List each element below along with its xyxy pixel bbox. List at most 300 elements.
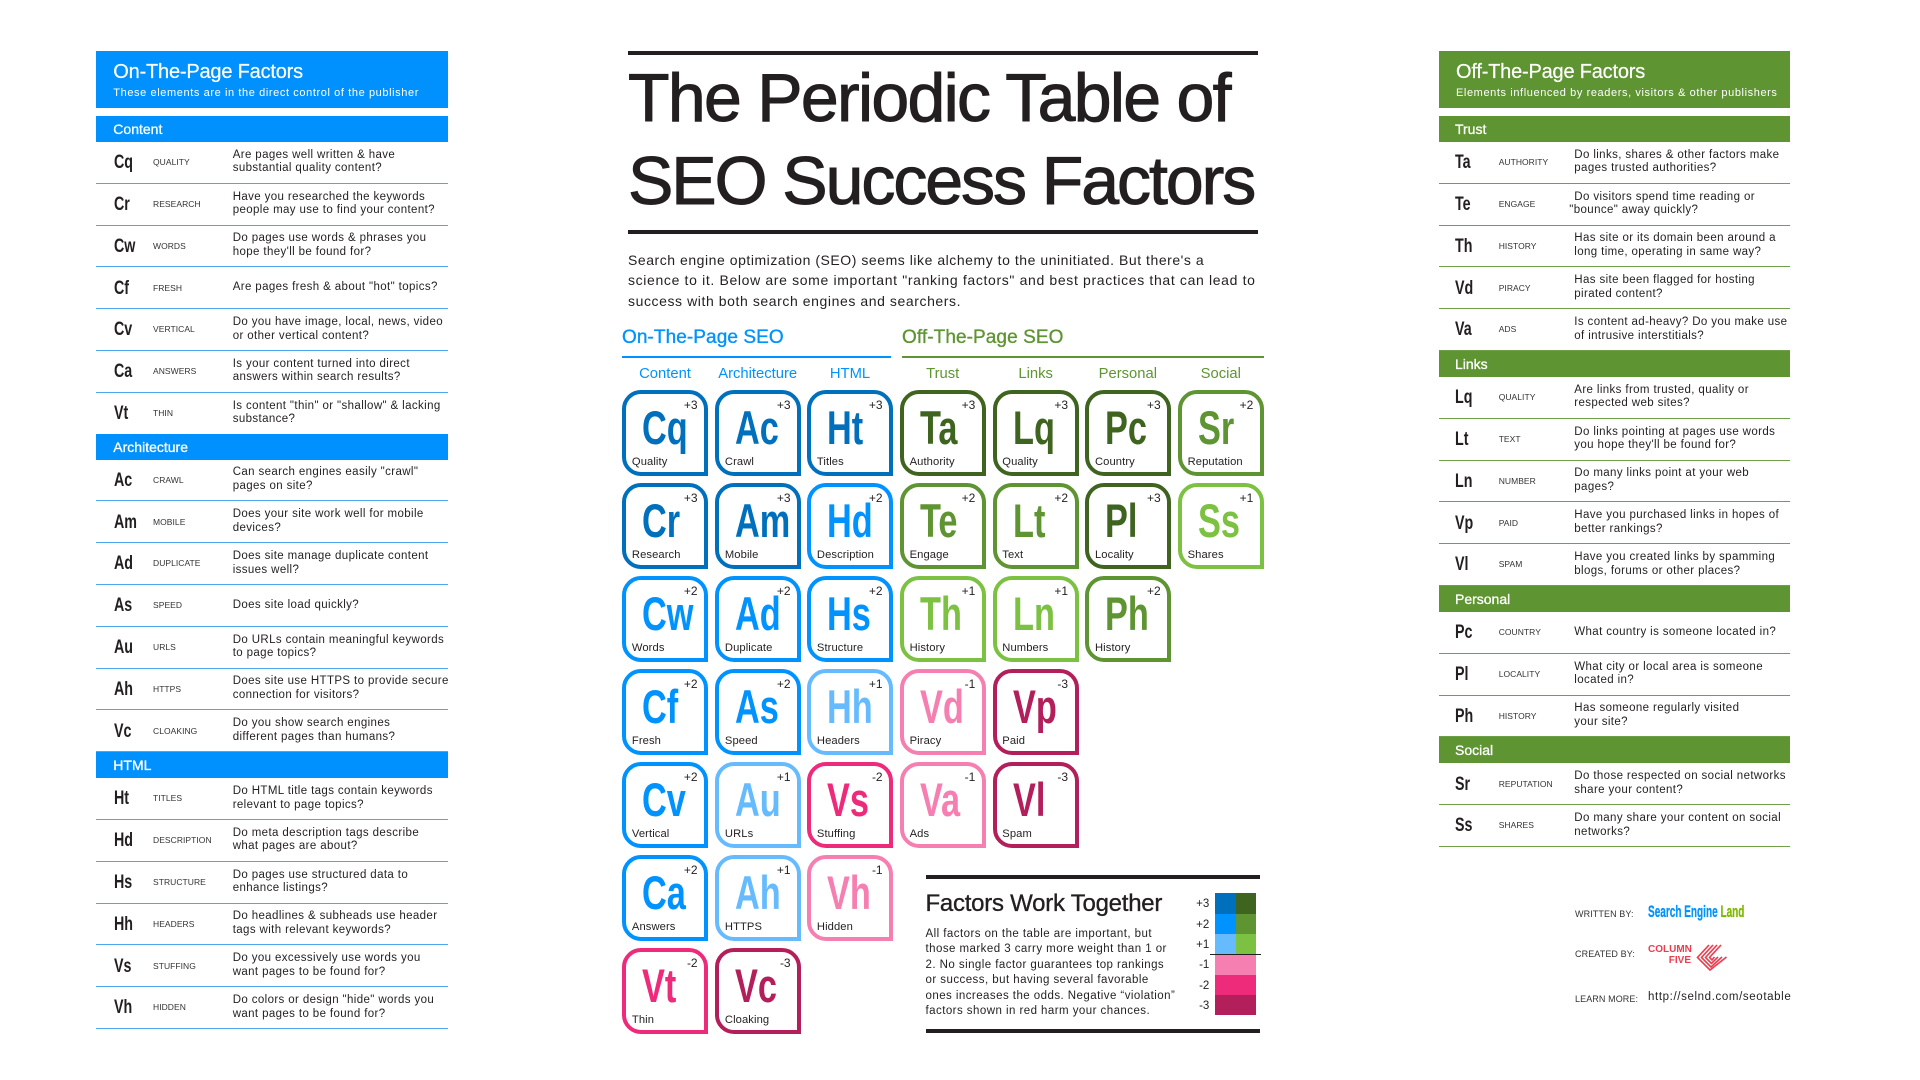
row: Ss: Do many share your content on social bbox=[1574, 812, 1781, 824]
row: Ca: Is your content turned into direct bbox=[233, 358, 410, 370]
legend body text: those marked 3 carry more weight than 1 or bbox=[926, 943, 1167, 955]
row: Au: Au bbox=[114, 637, 133, 658]
section bar: content: Content bbox=[113, 121, 162, 137]
element: Hd: +2 bbox=[869, 491, 883, 505]
credits: LEARN MORE: bbox=[1575, 994, 1638, 1004]
row: Te bbox=[1439, 184, 1790, 226]
element: Vp: -3 bbox=[1057, 677, 1068, 691]
row: Vc bbox=[96, 710, 448, 752]
row: Hd: Do meta description tags describe bbox=[233, 827, 419, 839]
legend: colour scale: -2 bbox=[1199, 980, 1209, 992]
element: Pc: Country bbox=[1095, 456, 1135, 468]
element: As bbox=[715, 669, 801, 755]
element: Ac: Crawl bbox=[725, 456, 754, 468]
element: Cw: +2 bbox=[684, 584, 698, 598]
row: Th: Th bbox=[1455, 236, 1472, 257]
row: Vd: Has site been flagged for hosting bbox=[1574, 274, 1755, 286]
row: Th bbox=[1439, 226, 1790, 267]
row: Hs: Hs bbox=[114, 872, 132, 893]
row: Ln: Ln bbox=[1455, 471, 1472, 492]
periodic table grid bbox=[622, 390, 1264, 1034]
legend: colour scale: +3 bbox=[1196, 898, 1209, 910]
element: Te: Te bbox=[920, 494, 958, 547]
row: Lt: you hope they'll be found for? bbox=[1574, 439, 1736, 451]
row: Vh: Vh bbox=[114, 997, 132, 1018]
legend: colour scale: +2 bbox=[1196, 918, 1209, 930]
row: Ca: answers within search results? bbox=[233, 371, 401, 383]
row: Vc: CLOAKING bbox=[153, 726, 197, 736]
row: Vp bbox=[1439, 502, 1790, 544]
element: Au: URLs bbox=[725, 828, 753, 840]
row: Th: Has site or its domain been around a bbox=[1574, 232, 1776, 244]
element: Hs bbox=[807, 576, 893, 662]
element: Hs: Hs bbox=[827, 587, 871, 640]
element: Sr: Reputation bbox=[1188, 456, 1243, 468]
element: Cf bbox=[622, 669, 708, 755]
element: Au: +1 bbox=[777, 770, 791, 784]
row: Va: ADS bbox=[1499, 324, 1516, 334]
row: Au bbox=[96, 627, 448, 669]
row: Ht: relevant to page topics? bbox=[233, 799, 364, 811]
section bar: trust: Trust bbox=[1455, 121, 1486, 137]
row: Hd: Hd bbox=[114, 830, 133, 851]
element: Ln: Numbers bbox=[1002, 642, 1048, 654]
row: Vt bbox=[96, 393, 448, 435]
row: Cr: people may use to find your content? bbox=[233, 204, 435, 216]
row: Lq: respected web sites? bbox=[1574, 397, 1690, 409]
element: Ah bbox=[715, 855, 801, 941]
row: Ta: AUTHORITY bbox=[1499, 157, 1548, 167]
row: Vl: Have you created links by spamming bbox=[1574, 551, 1775, 563]
section bar: html: HTML bbox=[113, 757, 151, 773]
logo: column five wordmark: COLUMN bbox=[1648, 944, 1692, 955]
row: Ad: Does site manage duplicate content bbox=[233, 550, 428, 562]
heading: off-the-page seo bbox=[902, 325, 1264, 358]
legend body text: 2. No single factor guarantees top rankings bbox=[926, 958, 1164, 970]
row: Ss: Ss bbox=[1455, 815, 1472, 836]
row: Hh: tags with relevant keywords? bbox=[233, 924, 391, 936]
logo: column five chevrons bbox=[1696, 944, 1727, 972]
element: Hs: +2 bbox=[869, 584, 883, 598]
element: Ph: History bbox=[1095, 642, 1130, 654]
row: Ah: connection for visitors? bbox=[233, 689, 359, 701]
element: Vt: Vt bbox=[642, 959, 677, 1012]
intro text: Search engine optimization (SEO) seems like alchemy to the uninitiated. But there's a bbox=[628, 252, 1204, 268]
element: Va bbox=[900, 762, 986, 848]
row: Th: long time, operating in same way? bbox=[1574, 246, 1761, 258]
row: Hs: Do pages use structured data to bbox=[233, 869, 408, 881]
panel header: Elements influenced by readers, visitors & other publishers bbox=[1456, 87, 1778, 99]
element: Pl: Locality bbox=[1095, 549, 1134, 561]
row: Ht bbox=[96, 778, 448, 820]
row: Cv: Cv bbox=[114, 319, 132, 340]
row: Vh: HIDDEN bbox=[153, 1002, 186, 1012]
element: Sr: +2 bbox=[1240, 398, 1253, 412]
row: Sr: Do those respected on social networks bbox=[1574, 770, 1786, 782]
panel: factors work together bbox=[926, 875, 1260, 1033]
element: Ad: Duplicate bbox=[725, 642, 772, 654]
heading: on-the-page seo bbox=[622, 325, 891, 358]
section bar: architecture: Architecture bbox=[113, 439, 188, 455]
row: Vp: Have you purchased links in hopes of bbox=[1574, 509, 1779, 521]
row: Cr: RESEARCH bbox=[153, 199, 201, 209]
panel: on-the-page factors bbox=[96, 51, 449, 1029]
row: Hd: DESCRIPTION bbox=[153, 835, 212, 845]
row: Pl: LOCALITY bbox=[1499, 669, 1540, 679]
row: Vl: SPAM bbox=[1499, 559, 1522, 569]
column headings: Links bbox=[1018, 366, 1053, 382]
row: Ad: DUPLICATE bbox=[153, 558, 201, 568]
element: Au bbox=[715, 762, 801, 848]
element: Cq: +3 bbox=[684, 398, 698, 412]
row: Te: Do visitors spend time reading or bbox=[1574, 191, 1755, 203]
element: Ah: Ah bbox=[735, 866, 781, 919]
element: Cf: +2 bbox=[684, 677, 698, 691]
element: Vp: Paid bbox=[1002, 735, 1025, 747]
row: Vs: STUFFING bbox=[153, 961, 196, 971]
element: Vc: Vc bbox=[735, 959, 777, 1012]
row: Am: Does your site work well for mobile bbox=[233, 508, 424, 520]
element: Ln bbox=[993, 576, 1079, 662]
row: Ca: ANSWERS bbox=[153, 366, 196, 376]
row: Cr bbox=[96, 184, 448, 226]
section bar: personal bbox=[1439, 586, 1790, 612]
row: Ht: TITLES bbox=[153, 793, 182, 803]
element: Cv: Cv bbox=[642, 773, 686, 826]
row: Ss: SHARES bbox=[1499, 820, 1534, 830]
element: Hh bbox=[807, 669, 893, 755]
row: Cq bbox=[96, 142, 448, 184]
section bar: trust bbox=[1439, 116, 1790, 142]
row: Vc: Do you show search engines bbox=[233, 717, 390, 729]
row: Vd bbox=[1439, 267, 1790, 309]
row: Pc: Pc bbox=[1455, 622, 1472, 643]
section bar: links bbox=[1439, 351, 1790, 377]
row: As: As bbox=[114, 595, 132, 616]
row: Ca: Ca bbox=[114, 361, 132, 382]
element: Cw: Words bbox=[632, 642, 665, 654]
element: Th: History bbox=[910, 642, 945, 654]
element: Ca: +2 bbox=[684, 863, 698, 877]
row: Ss bbox=[1439, 805, 1790, 847]
element: Am: Mobile bbox=[725, 549, 758, 561]
row: Ln: Do many links point at your web bbox=[1574, 467, 1749, 479]
row: Cv: VERTICAL bbox=[153, 324, 195, 334]
row: Ta: Do links, shares & other factors make bbox=[1574, 149, 1779, 161]
row: Pl: located in? bbox=[1574, 674, 1634, 686]
row: Hh: Do headlines & subheads use header bbox=[233, 910, 437, 922]
row: Vt: Vt bbox=[114, 403, 128, 424]
legend body text: factors shown in red harm your chances. bbox=[926, 1005, 1150, 1017]
row: Vp: PAID bbox=[1499, 518, 1518, 528]
section bar: content bbox=[96, 116, 448, 142]
element: Cv: Vertical bbox=[632, 828, 669, 840]
element: As: +2 bbox=[777, 677, 791, 691]
row: Cw: WORDS bbox=[153, 241, 186, 251]
element: Cr: Cr bbox=[642, 494, 680, 547]
element: Cv: +2 bbox=[684, 770, 698, 784]
element: Ac: Ac bbox=[735, 401, 779, 454]
section bar: social bbox=[1439, 737, 1790, 763]
element: Cw bbox=[622, 576, 708, 662]
element: Vt bbox=[622, 948, 708, 1034]
element: Vp: Vp bbox=[1013, 680, 1057, 733]
row: Cf bbox=[96, 267, 448, 309]
row: Ah: HTTPS bbox=[153, 684, 181, 694]
element: Ca: Ca bbox=[642, 866, 686, 919]
element: Hs: Structure bbox=[817, 642, 863, 654]
row: Vs: Vs bbox=[114, 956, 131, 977]
row: Cv: Do you have image, local, news, video bbox=[233, 316, 443, 328]
element: Cv bbox=[622, 762, 708, 848]
row: Vs: want pages to be found for? bbox=[233, 966, 386, 978]
element: Ht bbox=[807, 390, 893, 476]
panel: off-the-page factors bbox=[1439, 51, 1790, 847]
row: Ad bbox=[96, 543, 448, 585]
element: Vh bbox=[807, 855, 893, 941]
element: Ca: Answers bbox=[632, 921, 676, 933]
row: Cw bbox=[96, 226, 448, 267]
panel header: Off-The-Page Factors bbox=[1456, 61, 1645, 83]
row: Ln: pages? bbox=[1574, 481, 1614, 493]
element: Va: Va bbox=[920, 773, 960, 826]
element: Lq: Quality bbox=[1002, 456, 1038, 468]
column headings: HTML bbox=[830, 366, 870, 382]
row: Cw: Do pages use words & phrases you bbox=[233, 232, 426, 244]
element: Lq: +3 bbox=[1054, 398, 1068, 412]
element: Ac bbox=[715, 390, 801, 476]
row: Lt: Lt bbox=[1455, 429, 1468, 450]
element: Cf: Fresh bbox=[632, 735, 661, 747]
row: Lt: Do links pointing at pages use words bbox=[1574, 426, 1775, 438]
element: Ac: +3 bbox=[777, 398, 791, 412]
logo: column five wordmark: FIVE bbox=[1669, 955, 1691, 966]
element: Cq bbox=[622, 390, 708, 476]
row: Ad: Ad bbox=[114, 553, 133, 574]
row: Th: HISTORY bbox=[1499, 241, 1537, 251]
row: Cq: Cq bbox=[114, 152, 133, 173]
row: Lq: Are links from trusted, quality or bbox=[1574, 384, 1749, 396]
legend: colour scale: -3 bbox=[1199, 1000, 1209, 1012]
row: Lq: QUALITY bbox=[1499, 392, 1535, 402]
element: Lq bbox=[993, 390, 1079, 476]
row: Te: "bounce" away quickly? bbox=[1569, 204, 1698, 216]
element: Cf: Cf bbox=[642, 680, 679, 733]
element: Lt: Lt bbox=[1013, 494, 1045, 547]
element: Ss: +1 bbox=[1240, 491, 1253, 505]
element: Ph bbox=[1085, 576, 1171, 662]
element: Am bbox=[715, 483, 801, 569]
row: Cv bbox=[96, 309, 448, 351]
row: Ac bbox=[96, 460, 448, 501]
element: Vt: -2 bbox=[687, 956, 698, 970]
element: Hd: Description bbox=[817, 549, 874, 561]
element: Vd: -1 bbox=[965, 677, 975, 691]
row: Vh: want pages to be found for? bbox=[233, 1008, 386, 1020]
row: Vl: blogs, forums or other places? bbox=[1574, 565, 1740, 577]
row: Pc: What country is someone located in? bbox=[1574, 626, 1776, 638]
legend: colour scale: +1 bbox=[1196, 939, 1209, 951]
row: Vl bbox=[1439, 544, 1790, 586]
column headings: Social bbox=[1201, 366, 1241, 382]
row: Ac: Can search engines easily "crawl" bbox=[233, 466, 418, 478]
element: Ss: Ss bbox=[1198, 494, 1240, 547]
row: Am: MOBILE bbox=[153, 517, 185, 527]
row: Ac: Ac bbox=[114, 470, 132, 491]
row: Ta bbox=[1439, 142, 1790, 184]
row: Vh: Do colors or design "hide" words you bbox=[233, 994, 434, 1006]
element: Te bbox=[900, 483, 986, 569]
row: Hs: enhance listings? bbox=[233, 882, 328, 894]
intro text: success with both search engines and searchers. bbox=[628, 293, 961, 309]
element: Ph: +2 bbox=[1147, 584, 1161, 598]
element: Cr: Research bbox=[632, 549, 681, 561]
legend heading: Factors Work Together bbox=[926, 890, 1162, 917]
row: Vs: Do you excessively use words you bbox=[233, 952, 421, 964]
element: Lt: +2 bbox=[1054, 491, 1068, 505]
column headings: Trust bbox=[926, 366, 959, 382]
element: Ah: HTTPS bbox=[725, 921, 762, 933]
row: Vh bbox=[96, 987, 448, 1029]
row: Ta: pages trusted authorities? bbox=[1574, 162, 1716, 174]
element: Pl bbox=[1085, 483, 1171, 569]
row: Vl: Vl bbox=[1455, 554, 1468, 575]
element: Te: +2 bbox=[962, 491, 975, 505]
row: Vd: pirated content? bbox=[1574, 288, 1663, 300]
element: Pc: +3 bbox=[1147, 398, 1161, 412]
row: Au: URLS bbox=[153, 642, 176, 652]
row: Lt bbox=[1439, 419, 1790, 461]
element: Am: Am bbox=[735, 494, 791, 547]
element: Vs bbox=[807, 762, 893, 848]
title block: SEO Success Factors bbox=[628, 143, 1254, 219]
element: Vl bbox=[993, 762, 1079, 848]
element: Vl: Spam bbox=[1002, 828, 1032, 840]
row: Cq: substantial quality content? bbox=[233, 162, 382, 174]
element: Ln: Ln bbox=[1013, 587, 1055, 640]
section bar: social: Social bbox=[1455, 742, 1493, 758]
panel header: These elements are in the direct control of the publisher bbox=[113, 87, 419, 99]
element: Hh: +1 bbox=[869, 677, 883, 691]
legend body text: or success, but having several favorable bbox=[926, 974, 1149, 986]
element: Ah: +1 bbox=[777, 863, 791, 877]
element: Cw: Cw bbox=[642, 587, 694, 640]
element: Ht: +3 bbox=[869, 398, 883, 412]
row: Lq bbox=[1439, 377, 1790, 419]
row: Va: of intrusive interstitials? bbox=[1574, 330, 1704, 342]
element: Pc bbox=[1085, 390, 1171, 476]
element: Ta bbox=[900, 390, 986, 476]
element: As: As bbox=[735, 680, 779, 733]
element: Pl: Pl bbox=[1105, 494, 1138, 547]
row: Hd bbox=[96, 820, 448, 862]
element: Th: +1 bbox=[962, 584, 975, 598]
element: Am: +3 bbox=[777, 491, 791, 505]
element: Vd bbox=[900, 669, 986, 755]
row: Pl bbox=[1439, 654, 1790, 696]
heading: off-the-page seo: Off-The-Page SEO bbox=[902, 327, 1063, 348]
row: Cf: FRESH bbox=[153, 283, 182, 293]
row: Va: Is content ad-heavy? Do you make use bbox=[1574, 316, 1787, 328]
row: Cv: or other vertical content? bbox=[233, 330, 369, 342]
row: Te: ENGAGE bbox=[1499, 199, 1535, 209]
row: Vc: Vc bbox=[114, 721, 131, 742]
column headings: Architecture bbox=[718, 366, 797, 382]
row: Ah: Does site use HTTPS to provide secure bbox=[233, 675, 449, 687]
legend body text: All factors on the table are important, but bbox=[926, 928, 1152, 940]
element: Au: Au bbox=[735, 773, 781, 826]
row: Cw: hope they'll be found for? bbox=[233, 246, 371, 258]
row: Ah bbox=[96, 669, 448, 710]
row: Va: Va bbox=[1455, 319, 1472, 340]
credits bbox=[1575, 902, 1791, 1004]
row: Cw: Cw bbox=[114, 236, 135, 257]
element: Vs: Vs bbox=[827, 773, 869, 826]
intro text bbox=[628, 252, 1256, 309]
row: Hh bbox=[96, 904, 448, 945]
section bar: personal: Personal bbox=[1455, 591, 1510, 607]
row: Cq: Are pages well written & have bbox=[233, 149, 395, 161]
element: Ph: Ph bbox=[1105, 587, 1149, 640]
panel header bbox=[1439, 51, 1790, 108]
row: Vs bbox=[96, 945, 448, 987]
element: Vs: -2 bbox=[872, 770, 883, 784]
element: Sr bbox=[1178, 390, 1264, 476]
element: Vh: -1 bbox=[872, 863, 883, 877]
logo: column five wordmark bbox=[1648, 944, 1692, 966]
row: Te: Te bbox=[1455, 194, 1471, 215]
element: Vs: Stuffing bbox=[817, 828, 855, 840]
row: Ln: NUMBER bbox=[1499, 476, 1536, 486]
row: Am: devices? bbox=[233, 522, 281, 534]
title block bbox=[628, 51, 1258, 234]
row: Ln bbox=[1439, 461, 1790, 502]
element: Ht: Titles bbox=[817, 456, 844, 468]
element: Hh: Headers bbox=[817, 735, 860, 747]
element: Lt bbox=[993, 483, 1079, 569]
element: Hd bbox=[807, 483, 893, 569]
element: Ad bbox=[715, 576, 801, 662]
row: As: Does site load quickly? bbox=[233, 599, 359, 611]
element: Vd: Piracy bbox=[910, 735, 941, 747]
legend: colour scale bbox=[1196, 893, 1261, 1015]
row: Sr: share your content? bbox=[1574, 784, 1683, 796]
row: Hs: STRUCTURE bbox=[153, 877, 206, 887]
column headings: Content bbox=[639, 366, 691, 382]
row: Hs bbox=[96, 862, 448, 904]
element: Pl: +3 bbox=[1147, 491, 1161, 505]
row: Pc bbox=[1439, 612, 1790, 654]
element: Vc: Cloaking bbox=[725, 1014, 769, 1026]
element: Ca bbox=[622, 855, 708, 941]
row: Vp: better rankings? bbox=[1574, 523, 1663, 535]
row: Lt: TEXT bbox=[1499, 434, 1521, 444]
row: Ca bbox=[96, 351, 448, 393]
row: As bbox=[96, 585, 448, 627]
element: Ln: +1 bbox=[1054, 584, 1068, 598]
row: Vp: Vp bbox=[1455, 513, 1473, 534]
row: Cf: Cf bbox=[114, 278, 129, 299]
element: Ta: Ta bbox=[920, 401, 958, 454]
row: Vt: THIN bbox=[153, 408, 173, 418]
column headings bbox=[639, 366, 1241, 382]
row: Sr bbox=[1439, 763, 1790, 805]
logo: search engine land: Search Engine Land bbox=[1648, 902, 1744, 921]
element: Cr bbox=[622, 483, 708, 569]
credits: CREATED BY: bbox=[1575, 949, 1635, 959]
row: Sr: REPUTATION bbox=[1499, 779, 1553, 789]
element: Pc: Pc bbox=[1105, 401, 1147, 454]
